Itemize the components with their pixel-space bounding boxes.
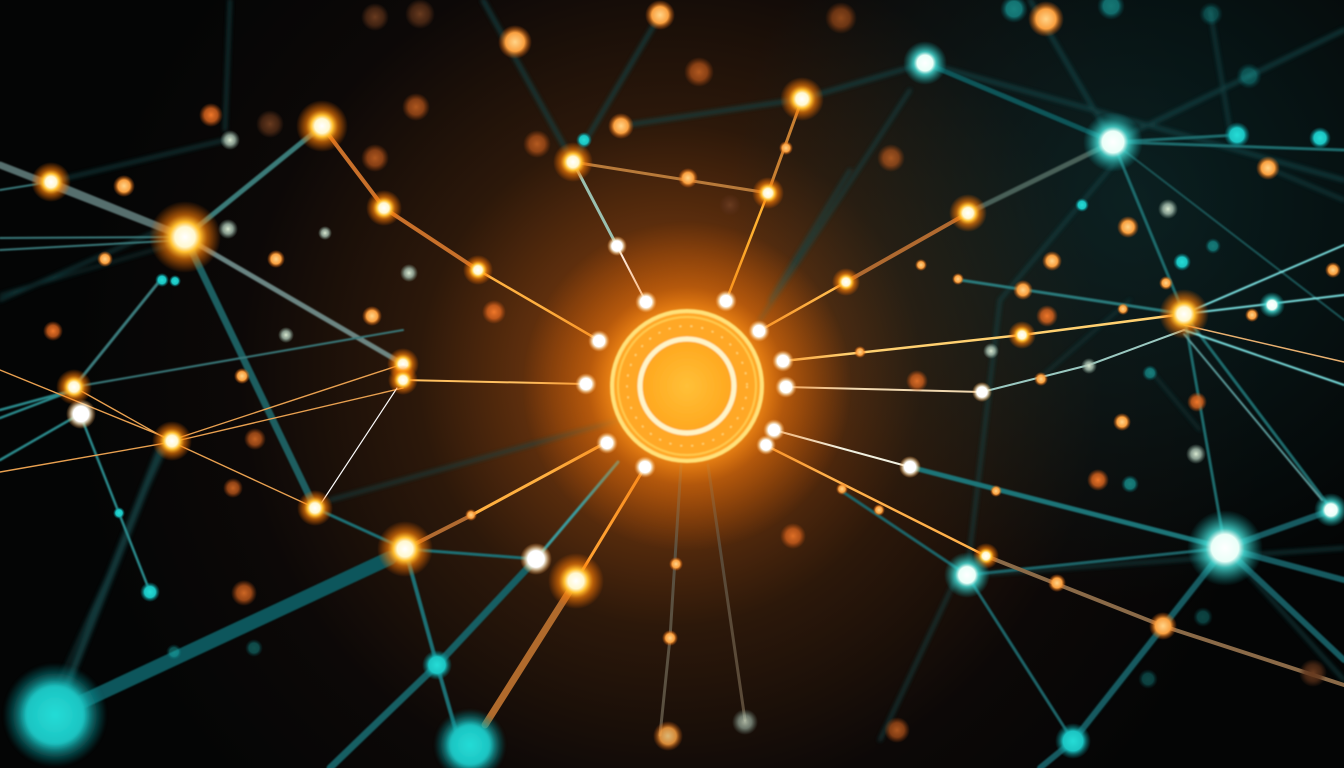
white junction nodes	[66, 236, 1344, 575]
glowing major nodes	[31, 41, 1263, 609]
tick ring	[627, 326, 747, 446]
hub disc	[611, 310, 763, 462]
outer ring highlight	[618, 317, 756, 455]
inner ring	[640, 339, 734, 433]
central hub	[611, 310, 763, 462]
outer ring	[612, 311, 762, 461]
hub glow	[522, 221, 852, 551]
large teal foreground nodes	[3, 663, 506, 768]
inner disc	[643, 342, 731, 430]
